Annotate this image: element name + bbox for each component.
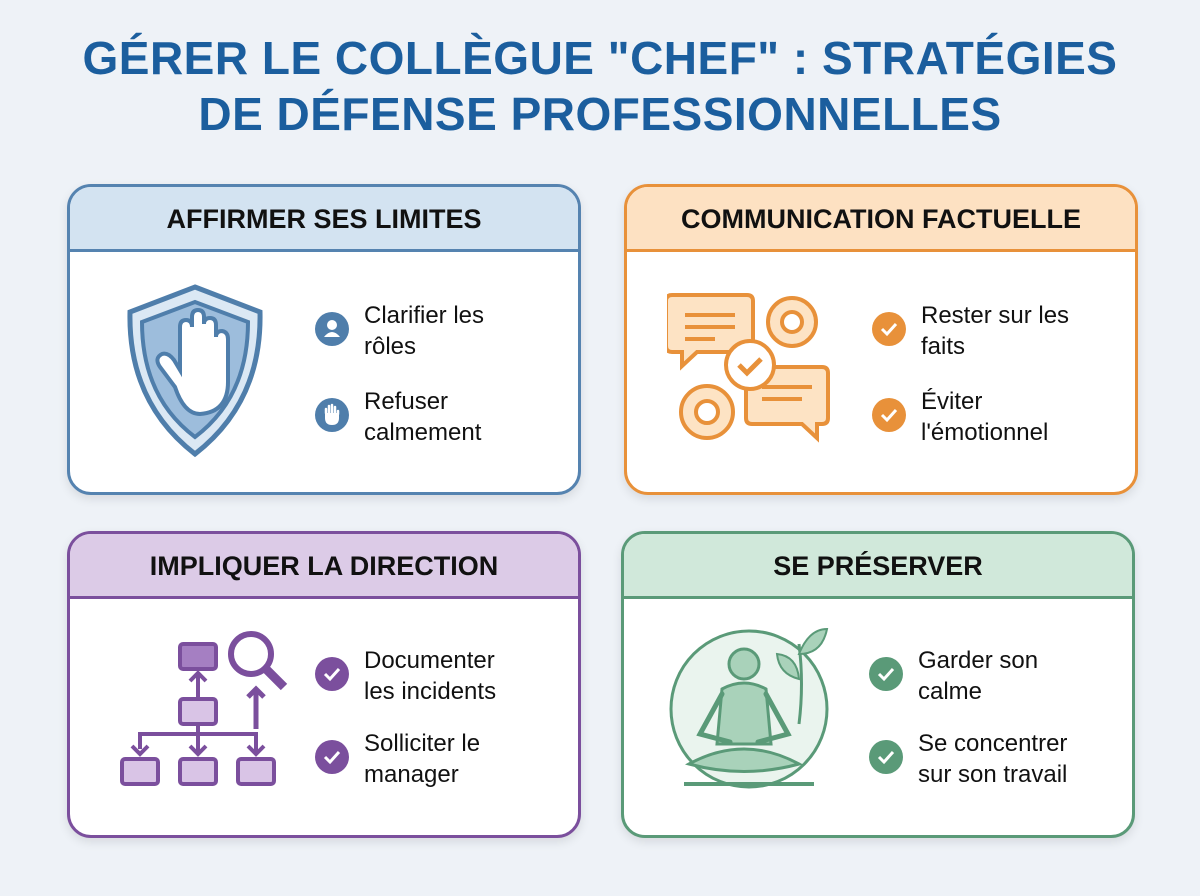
item: solliciter (315, 730, 480, 788)
icon: check (315, 740, 349, 774)
heading (624, 534, 1132, 599)
item: garder son calme (869, 647, 1038, 705)
icon: hand (315, 398, 349, 432)
title: DE DÉFENSE PROFESSIONNELLES (198, 88, 1002, 140)
heading: SE PRÉSERVER (773, 551, 983, 581)
icon: check (869, 657, 903, 691)
title (82, 32, 1118, 140)
item: se concentrer: Se concentrer (918, 730, 1067, 757)
icon: chat bubbles and gears (667, 293, 830, 442)
heading: IMPLIQUER LA DIRECTION (150, 551, 498, 581)
item: éviter l'émotionnel: l'émotionnel (921, 419, 1048, 446)
heading (70, 187, 578, 252)
item: rester sur les faits: Rester sur les (921, 302, 1069, 329)
item: éviter l'émotionnel (872, 388, 1048, 446)
heading (627, 187, 1135, 252)
item: documenter (315, 647, 496, 705)
icon: check (869, 740, 903, 774)
item: clarifier les rôles (315, 302, 484, 360)
title: GÉRER LE COLLÈGUE "CHEF" : STRATÉGIES (82, 32, 1118, 84)
heading: AFFIRMER SES LIMITES (166, 204, 482, 234)
item: garder son calme: calme (918, 678, 982, 705)
item: documenter: les incidents (364, 678, 496, 705)
panel: communication factuelle (624, 184, 1138, 495)
item: rester sur les faits: faits (921, 333, 965, 360)
item: se concentrer: sur son travail (918, 761, 1067, 788)
item: clarifier les rôles: rôles (364, 333, 416, 360)
panel: se préserver (621, 531, 1135, 838)
panel: impliquer la direction (67, 531, 581, 838)
item: se concentrer (869, 730, 1067, 788)
heading (70, 534, 578, 599)
item: garder son calme: Garder son (918, 647, 1038, 674)
icon: check (315, 657, 349, 691)
panel: affirmer ses limites (67, 184, 581, 495)
item: solliciter: manager (364, 761, 459, 788)
heading: COMMUNICATION FACTUELLE (681, 204, 1081, 234)
icon: check (872, 312, 906, 346)
icon: person (315, 312, 349, 346)
icon: org chart with magnifier (120, 631, 288, 786)
item: clarifier les rôles: Clarifier les (364, 302, 484, 329)
item: refuser calmement: Refuser (364, 388, 448, 415)
icon: shield with hand (127, 284, 263, 457)
item: solliciter: Solliciter le (364, 730, 480, 757)
item: refuser calmement (315, 388, 482, 446)
item: refuser calmement: calmement (364, 419, 481, 446)
icon: meditating person (670, 628, 828, 788)
item: rester sur les faits (872, 302, 1069, 360)
icon: check (872, 398, 906, 432)
item: éviter l'émotionnel: Éviter (921, 388, 982, 415)
item: documenter: Documenter (364, 647, 495, 674)
